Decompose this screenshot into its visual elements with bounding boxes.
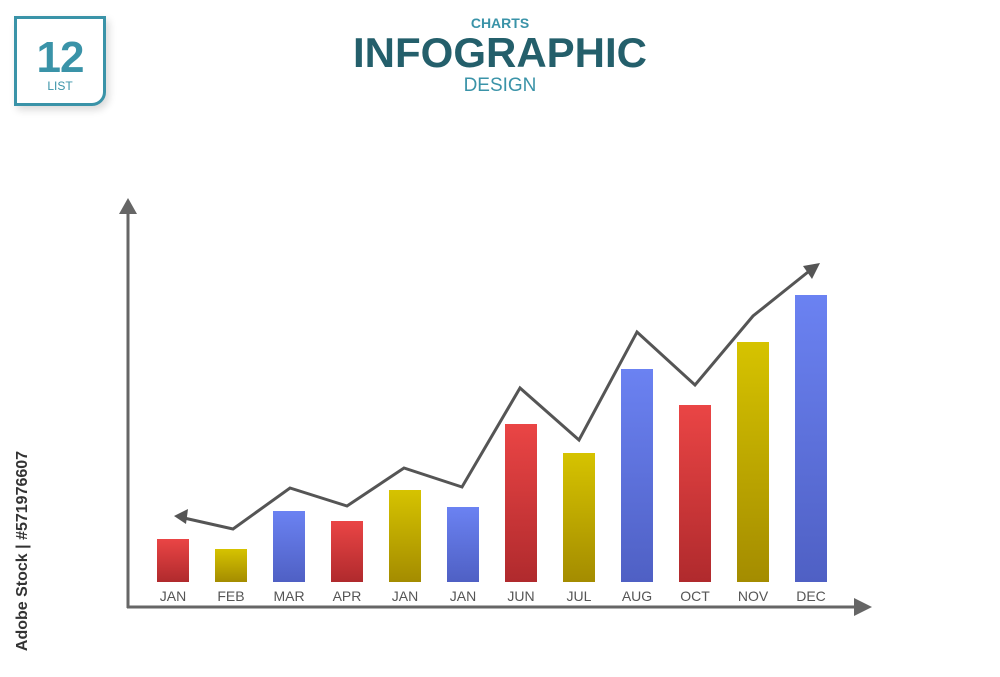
trend line arrow — [174, 263, 820, 529]
month labels: AUG — [622, 588, 652, 604]
month labels: JAN — [392, 588, 418, 604]
badge: 12 list: 12 — [37, 33, 83, 82]
bars — [157, 295, 827, 582]
month labels: NOV — [738, 588, 769, 604]
badge: 12 list: LIST — [47, 79, 73, 93]
month labels: JUL — [567, 588, 592, 604]
month labels: JAN — [160, 588, 186, 604]
badge: 12 list — [14, 16, 106, 106]
month labels: APR — [333, 588, 361, 604]
title block: INFOGRAPHIC — [353, 29, 647, 76]
title block — [353, 15, 647, 96]
month labels: JAN — [450, 588, 476, 604]
title block: CHARTS — [471, 15, 529, 31]
month labels: DEC — [796, 588, 826, 604]
axes — [119, 198, 872, 616]
month labels: OCT — [680, 588, 710, 604]
month labels: JUN — [507, 588, 535, 604]
month labels: FEB — [217, 588, 245, 604]
month labels: MAR — [273, 588, 305, 604]
side watermark text: Adobe Stock | #571976607 — [14, 451, 31, 651]
title block: DESIGN — [464, 75, 536, 96]
month labels — [160, 588, 826, 604]
